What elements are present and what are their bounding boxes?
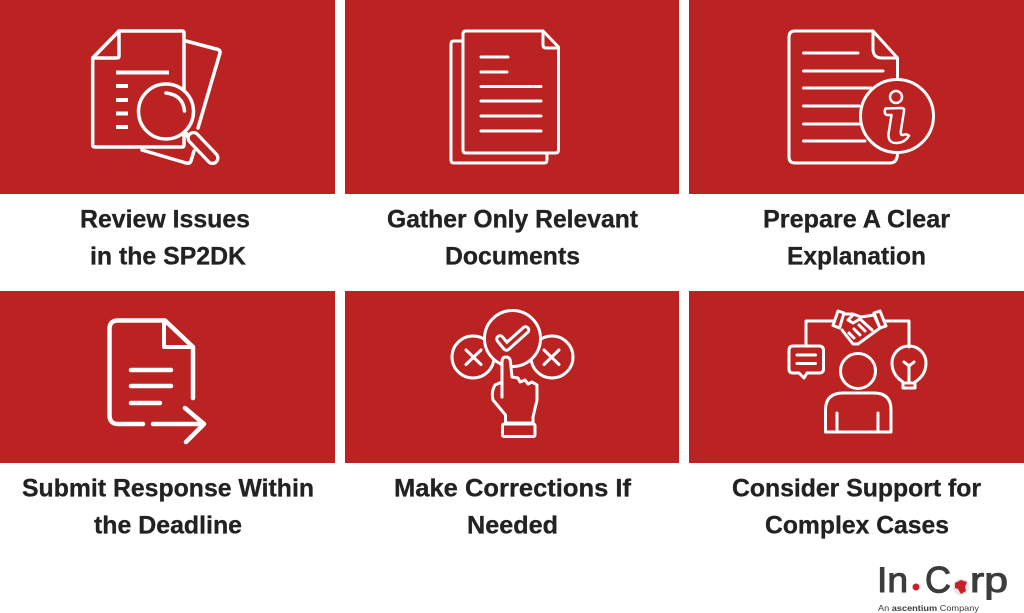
heading: clear explanation	[763, 206, 950, 270]
heading: make corrections: Needed	[467, 512, 558, 540]
heading: consider support: Consider Support for	[732, 474, 981, 502]
icon: stacked documents	[451, 31, 558, 163]
panel: review issues	[0, 0, 335, 194]
heading: gather documents: Documents	[445, 242, 580, 270]
heading: clear explanation: Explanation	[787, 242, 926, 270]
heading: gather documents: Gather Only Relevant	[387, 206, 639, 234]
logo: InCorp	[877, 560, 1008, 613]
panel: submit response	[0, 291, 335, 463]
heading: consider support	[732, 474, 981, 540]
heading: submit response: the Deadline	[94, 512, 242, 540]
icon: globe	[953, 579, 969, 595]
icon: hand choosing a check mark	[452, 310, 573, 436]
logo: InCorp: rp	[970, 561, 1008, 600]
heading: make corrections	[394, 474, 632, 540]
icon: document with magnifier	[93, 31, 220, 163]
panel: consider support	[689, 291, 1024, 463]
heading: review issues: in the SP2DK	[90, 242, 246, 270]
icon: document with info badge	[789, 31, 934, 163]
heading: gather documents	[387, 206, 639, 270]
heading: review issues: Review Issues	[80, 206, 250, 234]
heading: submit response	[22, 474, 314, 540]
panel: gather documents	[345, 0, 679, 194]
icon: person with handshake, speech bubble and light bulb	[789, 311, 926, 432]
heading: submit response: Submit Response Within	[22, 474, 314, 502]
panel: clear explanation	[689, 0, 1024, 194]
logo: InCorp: In	[877, 561, 908, 600]
heading: review issues	[80, 206, 250, 270]
logo: InCorp: C	[925, 560, 951, 600]
heading: clear explanation: Prepare A Clear	[763, 206, 950, 234]
heading: consider support: Complex Cases	[765, 512, 949, 540]
logo: InCorp: An ascentium Company	[878, 603, 980, 613]
heading: make corrections: Make Corrections If	[394, 474, 632, 502]
panel: make corrections	[345, 291, 679, 463]
icon: document with arrow	[110, 320, 204, 442]
